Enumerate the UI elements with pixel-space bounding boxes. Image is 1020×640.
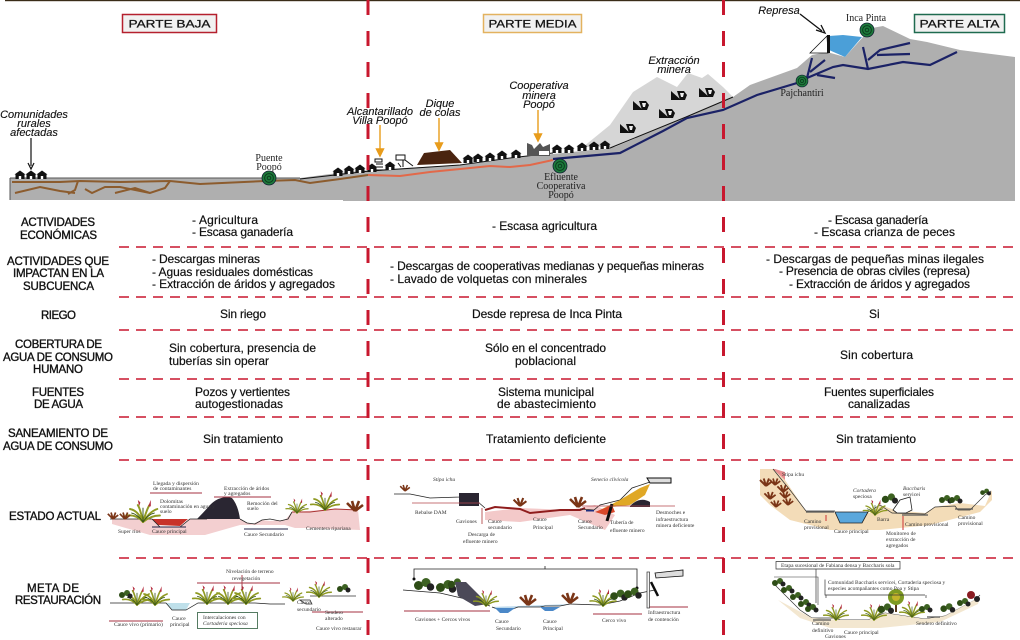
diagram: meta de restauración, parte alta: Gaviones xyxy=(825,634,846,640)
top edge line xyxy=(5,0,1020,1)
row labels xyxy=(3,217,113,607)
diagram: meta de restauración, parte baja: principal xyxy=(170,622,190,628)
label: Efluente xyxy=(537,172,586,201)
diagram: meta de restauración, parte media: Cauce xyxy=(495,619,509,625)
diagram: estado actual, parte baja: suelo xyxy=(160,509,172,515)
diagram: estado actual, parte baja: Cauce Secundario xyxy=(244,532,284,538)
diagram: meta de restauración, parte alta: Comunidad Baccharis servicei, Cortaderia speciosa y xyxy=(828,580,946,586)
diagram: estado actual, parte media xyxy=(394,477,695,545)
diagram: estado actual, parte baja: Dolomitas xyxy=(160,499,183,505)
label: Puente Poopó: Puente xyxy=(255,153,283,164)
arrow: alcantarillado xyxy=(376,125,384,156)
diagram: estado actual, parte alta: Cauce principal xyxy=(834,529,869,535)
heading: PARTE BAJA xyxy=(122,14,216,32)
diagram: meta de restauración, parte baja: alterado xyxy=(325,616,343,622)
houses xyxy=(14,140,610,179)
sewer and plant icons xyxy=(375,155,413,170)
diagram: meta de restauración, parte baja: Cauce vivo restaurar xyxy=(316,626,362,632)
column: parte baja text: - Escasa ganadería xyxy=(192,225,293,239)
diagram: estado actual, parte baja: Extracción de áridos xyxy=(224,486,269,492)
mountain xyxy=(583,73,733,147)
diagram: estado actual, parte alta: Camino xyxy=(804,519,822,525)
diagram: meta de restauración, parte media xyxy=(403,566,688,632)
diagram: estado actual, parte baja: Super ríos xyxy=(118,529,140,535)
column: parte baja text: Sin riego xyxy=(220,307,266,321)
diagram: estado actual, parte media: Cauce xyxy=(533,517,547,523)
column: parte baja text: Sin tratamiento xyxy=(203,432,283,446)
column: parte alta text: - Escasa crianza de peces xyxy=(814,225,955,239)
diagram: meta de restauración, parte baja: Cauce xyxy=(297,600,311,606)
column: parte alta text: - Extracción de áridos y agregados xyxy=(789,277,970,291)
row labels: COBERTURA DE xyxy=(15,339,102,351)
diagram: meta de restauración, parte media: Gaviones + Cercos vivos xyxy=(415,617,470,623)
diagram: estado actual, parte media: infraestructura xyxy=(656,516,689,523)
diagram: estado actual, parte alta: Baccharis xyxy=(903,486,925,492)
diagram: estado actual, parte baja: Llegada y dispersión xyxy=(153,481,199,487)
diagram: meta de restauración, parte baja: Sendero xyxy=(325,610,343,616)
tailings dam xyxy=(417,150,462,165)
terrain xyxy=(10,26,1015,201)
diagram: meta de restauración, parte alta: Sendero definitivo xyxy=(916,620,957,627)
column: parte baja text: tuberías sin operar xyxy=(169,354,269,368)
orange river xyxy=(368,160,553,176)
diagram: estado actual, parte alta xyxy=(760,469,992,549)
diagram: estado actual, parte media: minera deficiente xyxy=(656,522,695,529)
label: Alcantarillado: Villa Poopó xyxy=(352,115,408,127)
label: Cooperativa: minera xyxy=(522,90,556,102)
column: parte alta text: Sin cobertura xyxy=(840,348,913,362)
diagram: estado actual, parte baja: Remoción del xyxy=(247,501,278,507)
row labels: SUBCUENCA xyxy=(23,281,94,293)
row labels: FUENTES xyxy=(32,387,84,399)
column: parte alta text: Fuentes superficiales xyxy=(824,385,934,399)
label: Comunidades xyxy=(0,109,68,139)
diagram: meta de restauración, parte alta: especies acompañantes como Poa y Stipa xyxy=(828,586,919,592)
column: parte media text: - Lavado de volquetas con minerales xyxy=(390,272,587,286)
heading: PARTE MEDIA: PARTE MEDIA xyxy=(488,18,577,30)
row labels: RESTAURACIÓN xyxy=(15,594,101,607)
diagram: estado actual, parte baja: Cauce principal xyxy=(152,529,187,535)
column: parte alta text: Sin tratamiento xyxy=(836,432,916,446)
diagram: meta de restauración, parte baja: Cauce xyxy=(172,616,186,622)
diagram: meta de restauración, parte alta: definitivo xyxy=(812,627,834,634)
row labels: META DE xyxy=(27,583,79,595)
diagram: meta de restauración, parte baja: secundario xyxy=(297,607,321,613)
diagram: meta de restauración, parte media: Infraestructura xyxy=(648,609,681,616)
row labels: ACTIVIDADES QUE xyxy=(7,256,109,268)
label: Puente Poopó xyxy=(255,153,283,173)
row labels: RIEGO xyxy=(41,310,76,322)
arrow: cooperativa xyxy=(534,110,542,141)
diagram: meta de restauración, parte baja: Cauce vivo (primario) xyxy=(114,621,163,628)
diagram: estado actual, parte alta: Stipa ichu xyxy=(782,472,804,478)
label: Cooperativa xyxy=(509,80,569,111)
diagram: meta de restauración, parte baja: Intercalaciones con xyxy=(203,615,246,621)
diagram: meta de restauración, parte alta xyxy=(772,562,980,640)
column: parte media text: de abastecimiento xyxy=(497,397,596,411)
monitoring points xyxy=(262,23,874,185)
column: parte media text: Sólo en el concentrado xyxy=(485,341,606,355)
diagram: estado actual, parte baja xyxy=(108,481,363,538)
heading: PARTE BAJA: PARTE BAJA xyxy=(128,18,211,30)
mining icons xyxy=(620,88,715,133)
diagram: estado actual, parte media: efluente minero xyxy=(610,527,645,534)
row labels: ACTIVIDADES xyxy=(21,217,95,229)
column: parte alta text xyxy=(766,213,984,446)
diagram: meta de restauración, parte alta: Camino xyxy=(812,621,830,627)
diagram: estado actual, parte baja: de contaminantes xyxy=(153,486,191,492)
heading: PARTE ALTA: PARTE ALTA xyxy=(920,18,1000,30)
panel: watershed cross-section xyxy=(0,5,1015,201)
diagram: estado actual, parte alta: Cortadera xyxy=(853,488,876,494)
reservoir and dam xyxy=(810,35,862,57)
label: Comunidades: rurales xyxy=(17,118,51,130)
label: Dique xyxy=(420,98,461,119)
label: Efluente: Efluente xyxy=(544,172,578,183)
column: parte baja text: Pozos y vertientes xyxy=(195,385,290,399)
label: Alcantarillado: Alcantarillado xyxy=(346,106,413,118)
diagram: estado actual, parte baja: contaminación en agua y xyxy=(160,504,215,510)
column: parte alta text: canalizadas xyxy=(848,397,910,411)
row labels: ECONÓMICAS xyxy=(20,229,97,242)
arrow: dique xyxy=(436,118,442,150)
column: parte media text: poblacional xyxy=(515,354,576,368)
label: Extracción minera: Extracción xyxy=(648,55,700,67)
column: parte alta text: - Descargas de pequeñas minas ilegales xyxy=(766,252,984,266)
diagram: estado actual, parte alta: agregados xyxy=(886,543,908,549)
label: Puente Poopó: Poopó xyxy=(256,162,282,173)
label: Cooperativa: Poopó xyxy=(523,99,555,111)
column: parte media text xyxy=(390,219,704,446)
label: Alcantarillado xyxy=(346,106,413,127)
diagram: estado actual, parte alta: extracción de xyxy=(886,537,916,543)
label: Extracción minera: minera xyxy=(657,64,691,76)
diagram: estado actual, parte media: Cauce xyxy=(578,519,592,525)
diagram: estado actual, parte media: Descarga de xyxy=(468,532,495,538)
diagram: meta de restauración, parte media: Secundario xyxy=(496,626,521,632)
column: parte baja text: autogestionadas xyxy=(195,397,283,411)
diagram: estado actual, parte alta: provisional xyxy=(958,521,983,527)
label: Inca Pinta: Inca Pinta xyxy=(846,13,887,24)
diagram: estado actual, parte media: Principal xyxy=(533,525,553,531)
cooperative factory xyxy=(527,143,550,156)
column: parte baja text: - Descargas mineras xyxy=(152,252,260,266)
diagram: meta de restauración, parte baja: Cortaderia speciosa xyxy=(203,621,248,627)
row labels: SANEAMIENTO DE xyxy=(8,428,108,440)
column: parte baja text: - Aguas residuales domésticas xyxy=(152,265,313,279)
diagram: meta de restauración, parte alta: Cauce principal xyxy=(844,630,879,636)
brown river xyxy=(12,175,368,194)
diagram: estado actual, parte media: efluente minero xyxy=(463,538,498,545)
blue river xyxy=(553,43,957,159)
column: parte alta text: - Escasa ganadería xyxy=(828,213,928,227)
label: Efluente: Poopó xyxy=(548,190,574,201)
arrow: represa xyxy=(800,14,825,33)
diagram: meta de restauración, parte baja xyxy=(109,569,363,632)
diagram: estado actual, parte media: Senecio clivicola xyxy=(591,477,629,483)
diagram: estado actual, parte alta: Camino provisional xyxy=(905,522,949,528)
diagram: meta de restauración, parte baja: revegetación xyxy=(232,576,260,582)
diagram: estado actual, parte media: Gaviones xyxy=(456,519,477,525)
surface line xyxy=(300,97,733,179)
column: parte media text: Tratamiento deficiente xyxy=(486,432,606,446)
label: Efluente: Cooperativa xyxy=(537,181,586,192)
diagram: estado actual, parte alta: Barra xyxy=(877,517,890,523)
column: parte media text: Sistema municipal xyxy=(498,385,594,399)
column: parte media text: - Escasa agricultura xyxy=(492,219,597,233)
diagram: estado actual, parte media: Rebalse DAM xyxy=(415,510,447,516)
row labels: AGUA DE CONSUMO xyxy=(3,441,113,453)
label: Pajchantiri: Pajchantiri xyxy=(780,88,824,99)
diagram: estado actual, parte alta: provisional xyxy=(804,525,829,531)
diagram: estado actual, parte media: Secundario xyxy=(578,525,603,531)
diagram: estado actual, parte alta: Camino xyxy=(958,515,976,521)
column: parte baja text xyxy=(152,213,335,446)
diagram: estado actual, parte media: Cauce xyxy=(488,519,502,525)
label: Cooperativa: Cooperativa xyxy=(509,80,569,92)
column: parte media text: - Descargas de cooperativas medianas y pequeñas mineras xyxy=(390,259,704,273)
diagram: meta de restauración, parte media: Cerco vivo xyxy=(602,618,627,624)
diagram: estado actual, parte alta: speciosa xyxy=(853,494,872,500)
diagram: estado actual, parte alta: Monitoreo de xyxy=(886,531,916,537)
diagram: estado actual, parte media: secundario xyxy=(488,525,512,531)
label: Extracción minera xyxy=(648,55,700,76)
diagram: meta de restauración, parte baja: Nivelación de terreno xyxy=(226,569,274,575)
row labels: DE AGUA xyxy=(34,399,83,411)
diagram: estado actual, parte baja: Cementera ripariana xyxy=(306,526,351,532)
diagram: estado actual, parte media: Desmoches e xyxy=(656,510,686,516)
row labels: HUMANO xyxy=(33,364,83,376)
diagram: estado actual, parte media: Stipa ichu xyxy=(433,477,455,483)
diagram: estado actual, parte alta: servicei xyxy=(903,492,921,498)
column: parte alta text: Si xyxy=(869,307,880,321)
heading: PARTE MEDIA xyxy=(484,14,582,32)
label: Comunidades: afectadas xyxy=(10,127,58,139)
diagram: estado actual, parte media: Tubería de xyxy=(610,520,634,526)
diagram: meta de restauración, parte media: de contención xyxy=(648,617,679,623)
row labels: ESTADO ACTUAL xyxy=(9,511,102,523)
column: parte baja text: - Agricultura xyxy=(192,213,258,227)
column: parte alta text: - Presencia de obras civiles (represa) xyxy=(779,264,970,278)
arrow: comunidades xyxy=(28,138,34,169)
label: Comunidades: Comunidades xyxy=(0,109,68,121)
diagram: meta de restauración, parte media: Cauce xyxy=(543,619,557,625)
row labels: AGUA DE CONSUMO xyxy=(3,352,113,364)
label: Represa: Represa xyxy=(758,5,800,17)
label: Dique: de colas xyxy=(420,107,461,119)
diagram: meta de restauración, parte alta: Etapa sucesional de Fabiana densa y Baccharis sola xyxy=(781,563,895,569)
column: parte media text: Desde represa de Inca Pinta xyxy=(472,307,622,321)
diagram: estado actual, parte baja: y agregados xyxy=(224,491,250,497)
column: parte baja text: Sin cobertura, presencia de xyxy=(169,341,316,355)
diagram: meta de restauración, parte media: Principal xyxy=(543,626,563,632)
column: parte baja text: - Extracción de áridos y agregados xyxy=(152,277,335,291)
diagram: estado actual, parte baja: suelo xyxy=(247,506,259,512)
row labels: IMPACTAN EN LA xyxy=(13,268,104,280)
heading: PARTE ALTA xyxy=(914,14,1004,32)
label: Dique: Dique xyxy=(426,98,454,110)
